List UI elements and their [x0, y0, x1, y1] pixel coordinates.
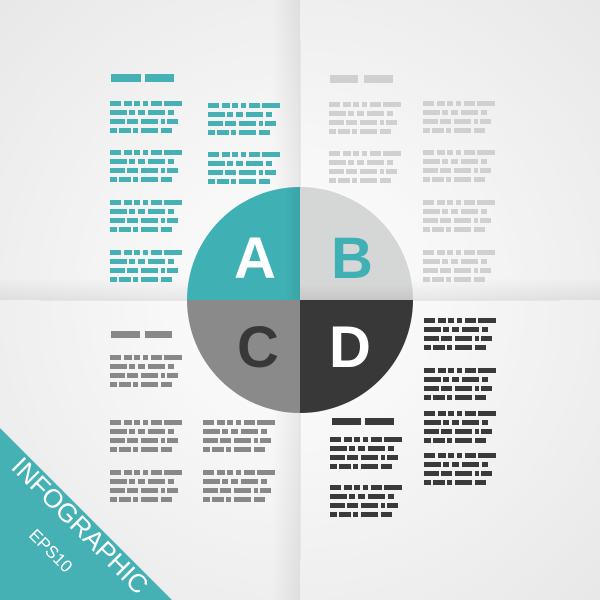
panel: B text (light gray)	[329, 75, 495, 282]
banner: teal corner triangle: EPS10	[25, 525, 76, 576]
circle chart: D	[329, 315, 371, 380]
panel: C text (gray)	[110, 331, 275, 502]
panel: A text (teal)	[110, 74, 280, 282]
panel: D text (dark)	[330, 318, 496, 517]
banner: teal corner triangle: INFOGRAPHIC	[6, 451, 155, 600]
circle chart	[187, 187, 413, 413]
circle chart: A	[234, 226, 276, 291]
circle chart: B	[331, 226, 373, 291]
circle chart: C	[237, 315, 279, 380]
